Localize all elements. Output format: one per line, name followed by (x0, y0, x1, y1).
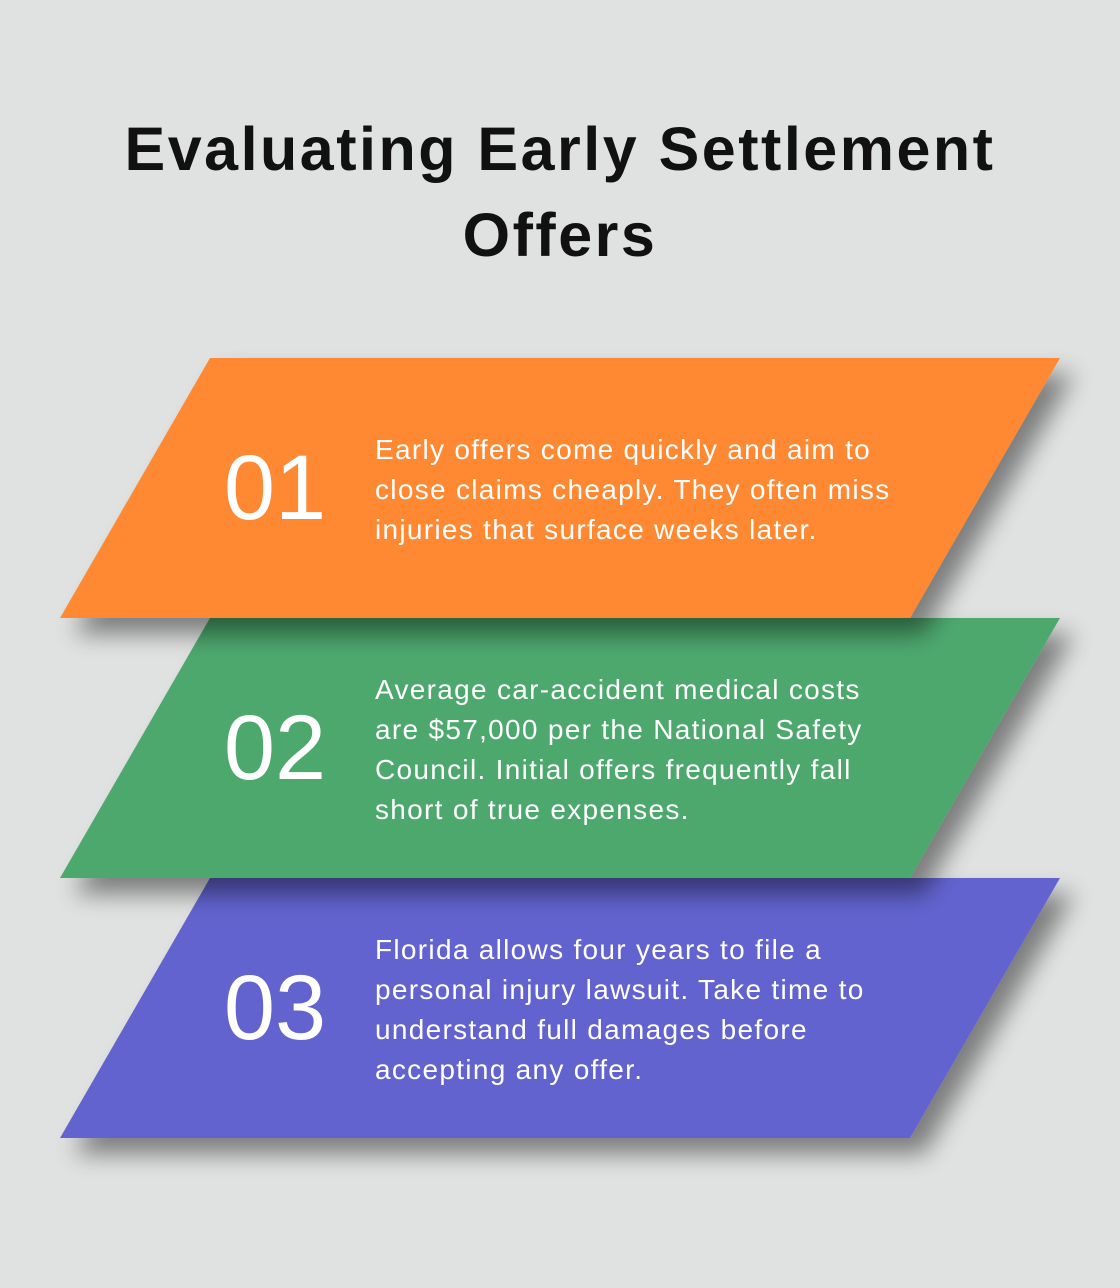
text 3 (375, 934, 865, 1085)
panel 3 (224, 934, 865, 1085)
panel 2 (224, 674, 863, 825)
title (125, 115, 995, 269)
text 1: Early offers come quickly and aim to (375, 434, 871, 465)
text 2 (375, 674, 863, 825)
panel 1 (224, 434, 890, 545)
text 1: injuries that surface weeks later. (375, 514, 818, 545)
number 01: 01 (224, 437, 326, 539)
text 3: personal injury lawsuit. Take time to (375, 974, 865, 1005)
title: Evaluating Early Settlement (125, 115, 995, 183)
text 3: understand full damages before (375, 1014, 808, 1045)
text 3: Florida allows four years to file a (375, 934, 822, 965)
text 2: Average car-accident medical costs (375, 674, 861, 705)
number 03: 03 (224, 957, 326, 1059)
text 2: short of true expenses. (375, 794, 690, 825)
number 02: 02 (224, 697, 326, 799)
text 2: Council. Initial offers frequently fall (375, 754, 852, 785)
text 1: close claims cheaply. They often miss (375, 474, 890, 505)
text 2: are $57,000 per the National Safety (375, 714, 863, 745)
text 3: accepting any offer. (375, 1054, 643, 1085)
title: Offers (463, 201, 657, 269)
text 1 (375, 434, 890, 545)
